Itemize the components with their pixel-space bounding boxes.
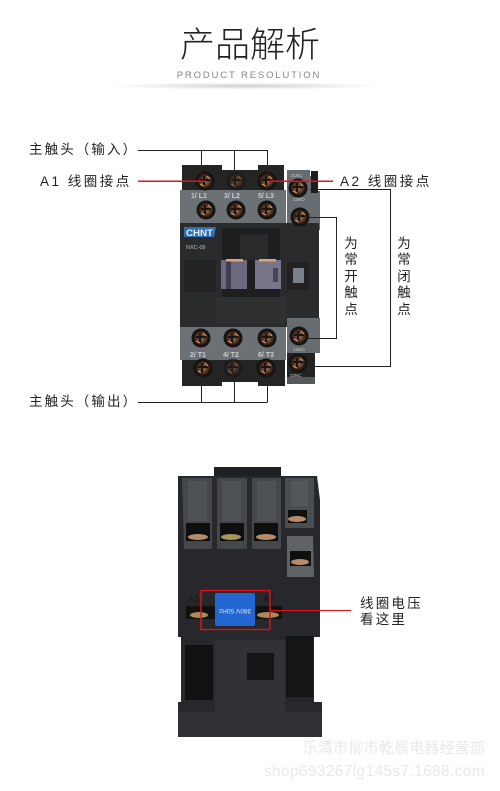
label: normally open contact: 开 [344, 269, 358, 284]
coil terminals A1 A2: A2 [263, 594, 274, 604]
red leader line [270, 610, 351, 612]
leader lines: A1 [138, 180, 205, 182]
upper body [178, 476, 320, 637]
label: normally closed contact: 为 [397, 236, 411, 251]
lower grey band [180, 327, 286, 360]
terminal markings [190, 173, 305, 378]
coil terminals A1 A2: A1 [188, 594, 199, 604]
terminal markings: 14NO [293, 347, 305, 352]
red highlight box [201, 590, 270, 630]
label: normally open contact: 触 [344, 285, 358, 300]
blue voltage cover: 380V 50Hz [219, 607, 251, 614]
lower auxiliary block [287, 318, 320, 353]
title shadow [110, 82, 380, 90]
top tab [214, 467, 281, 479]
label: coil voltage [360, 596, 423, 627]
label: main output: 主触头（输出） [29, 394, 138, 409]
label: normally open contact: 常 [344, 252, 358, 267]
label: coil voltage: 线圈电压 [360, 596, 423, 611]
label: main input: 主触头（输入） [29, 142, 138, 157]
central dark body [180, 223, 319, 327]
terminal markings: 1/ L1 [191, 193, 207, 200]
terminal markings: 22NC [290, 373, 302, 378]
leader lines: A2 [268, 180, 333, 182]
CHNT logo: CHNT [186, 228, 214, 238]
label: normally open contact: 为 [344, 236, 358, 251]
contactor: rear view [178, 467, 322, 737]
bottom dark terminal block [182, 360, 285, 386]
label: normally open contact: 点 [344, 302, 358, 317]
subtitle: PRODUCT RESOLUTION [177, 70, 321, 81]
base [178, 712, 322, 737]
purple contact windows [221, 259, 281, 289]
coil terminals A1 A2 [186, 594, 282, 619]
auxiliary clip [287, 536, 314, 577]
terminal markings: 4/ T2 [223, 352, 239, 359]
lower body [178, 636, 322, 737]
screws [192, 172, 310, 378]
lower dark moulding [216, 297, 286, 323]
bracket: normally closed [306, 190, 390, 366]
label: normally closed contact: 闭 [397, 269, 411, 284]
terminal markings: 3/ L2 [224, 193, 240, 200]
terminal chutes [182, 478, 314, 549]
label: normally closed contact: 触 [397, 285, 411, 300]
label: normally closed contact [397, 236, 411, 317]
bracket: normally open [308, 218, 336, 338]
centre window [247, 653, 274, 680]
label: A1 coil contact: A1 线圈接点 [40, 173, 132, 189]
model label: NXC-09 [186, 245, 206, 251]
top dark terminal block [182, 165, 284, 191]
terminal markings: 13NO [293, 197, 305, 202]
watermark: url: shop693267lg145s7.1688.com [264, 763, 485, 780]
terminal markings: 6/ T3 [258, 352, 274, 359]
watermark: shop name: 乐清市柳市乾晨电器经营部 [303, 740, 485, 757]
title: 产品解析 [180, 17, 320, 68]
leader lines: main output [138, 372, 268, 402]
upper grey band [180, 190, 286, 223]
terminal markings: 5/ L3 [258, 193, 274, 200]
upper auxiliary block [287, 170, 320, 230]
contactor: front view [180, 165, 320, 386]
indicator window [287, 262, 309, 290]
terminal markings: 2/ T1 [190, 352, 206, 359]
label: coil voltage: 看这里 [360, 611, 407, 627]
label: A2 coil contact: A2 线圈接点 [340, 173, 432, 189]
leader lines: main input [138, 150, 268, 176]
label: normally closed contact: 点 [397, 302, 411, 317]
label: normally open contact [344, 236, 358, 317]
blue voltage cover [215, 593, 255, 626]
terminal markings: 21NC [291, 173, 303, 178]
label: normally closed contact: 常 [397, 252, 411, 267]
